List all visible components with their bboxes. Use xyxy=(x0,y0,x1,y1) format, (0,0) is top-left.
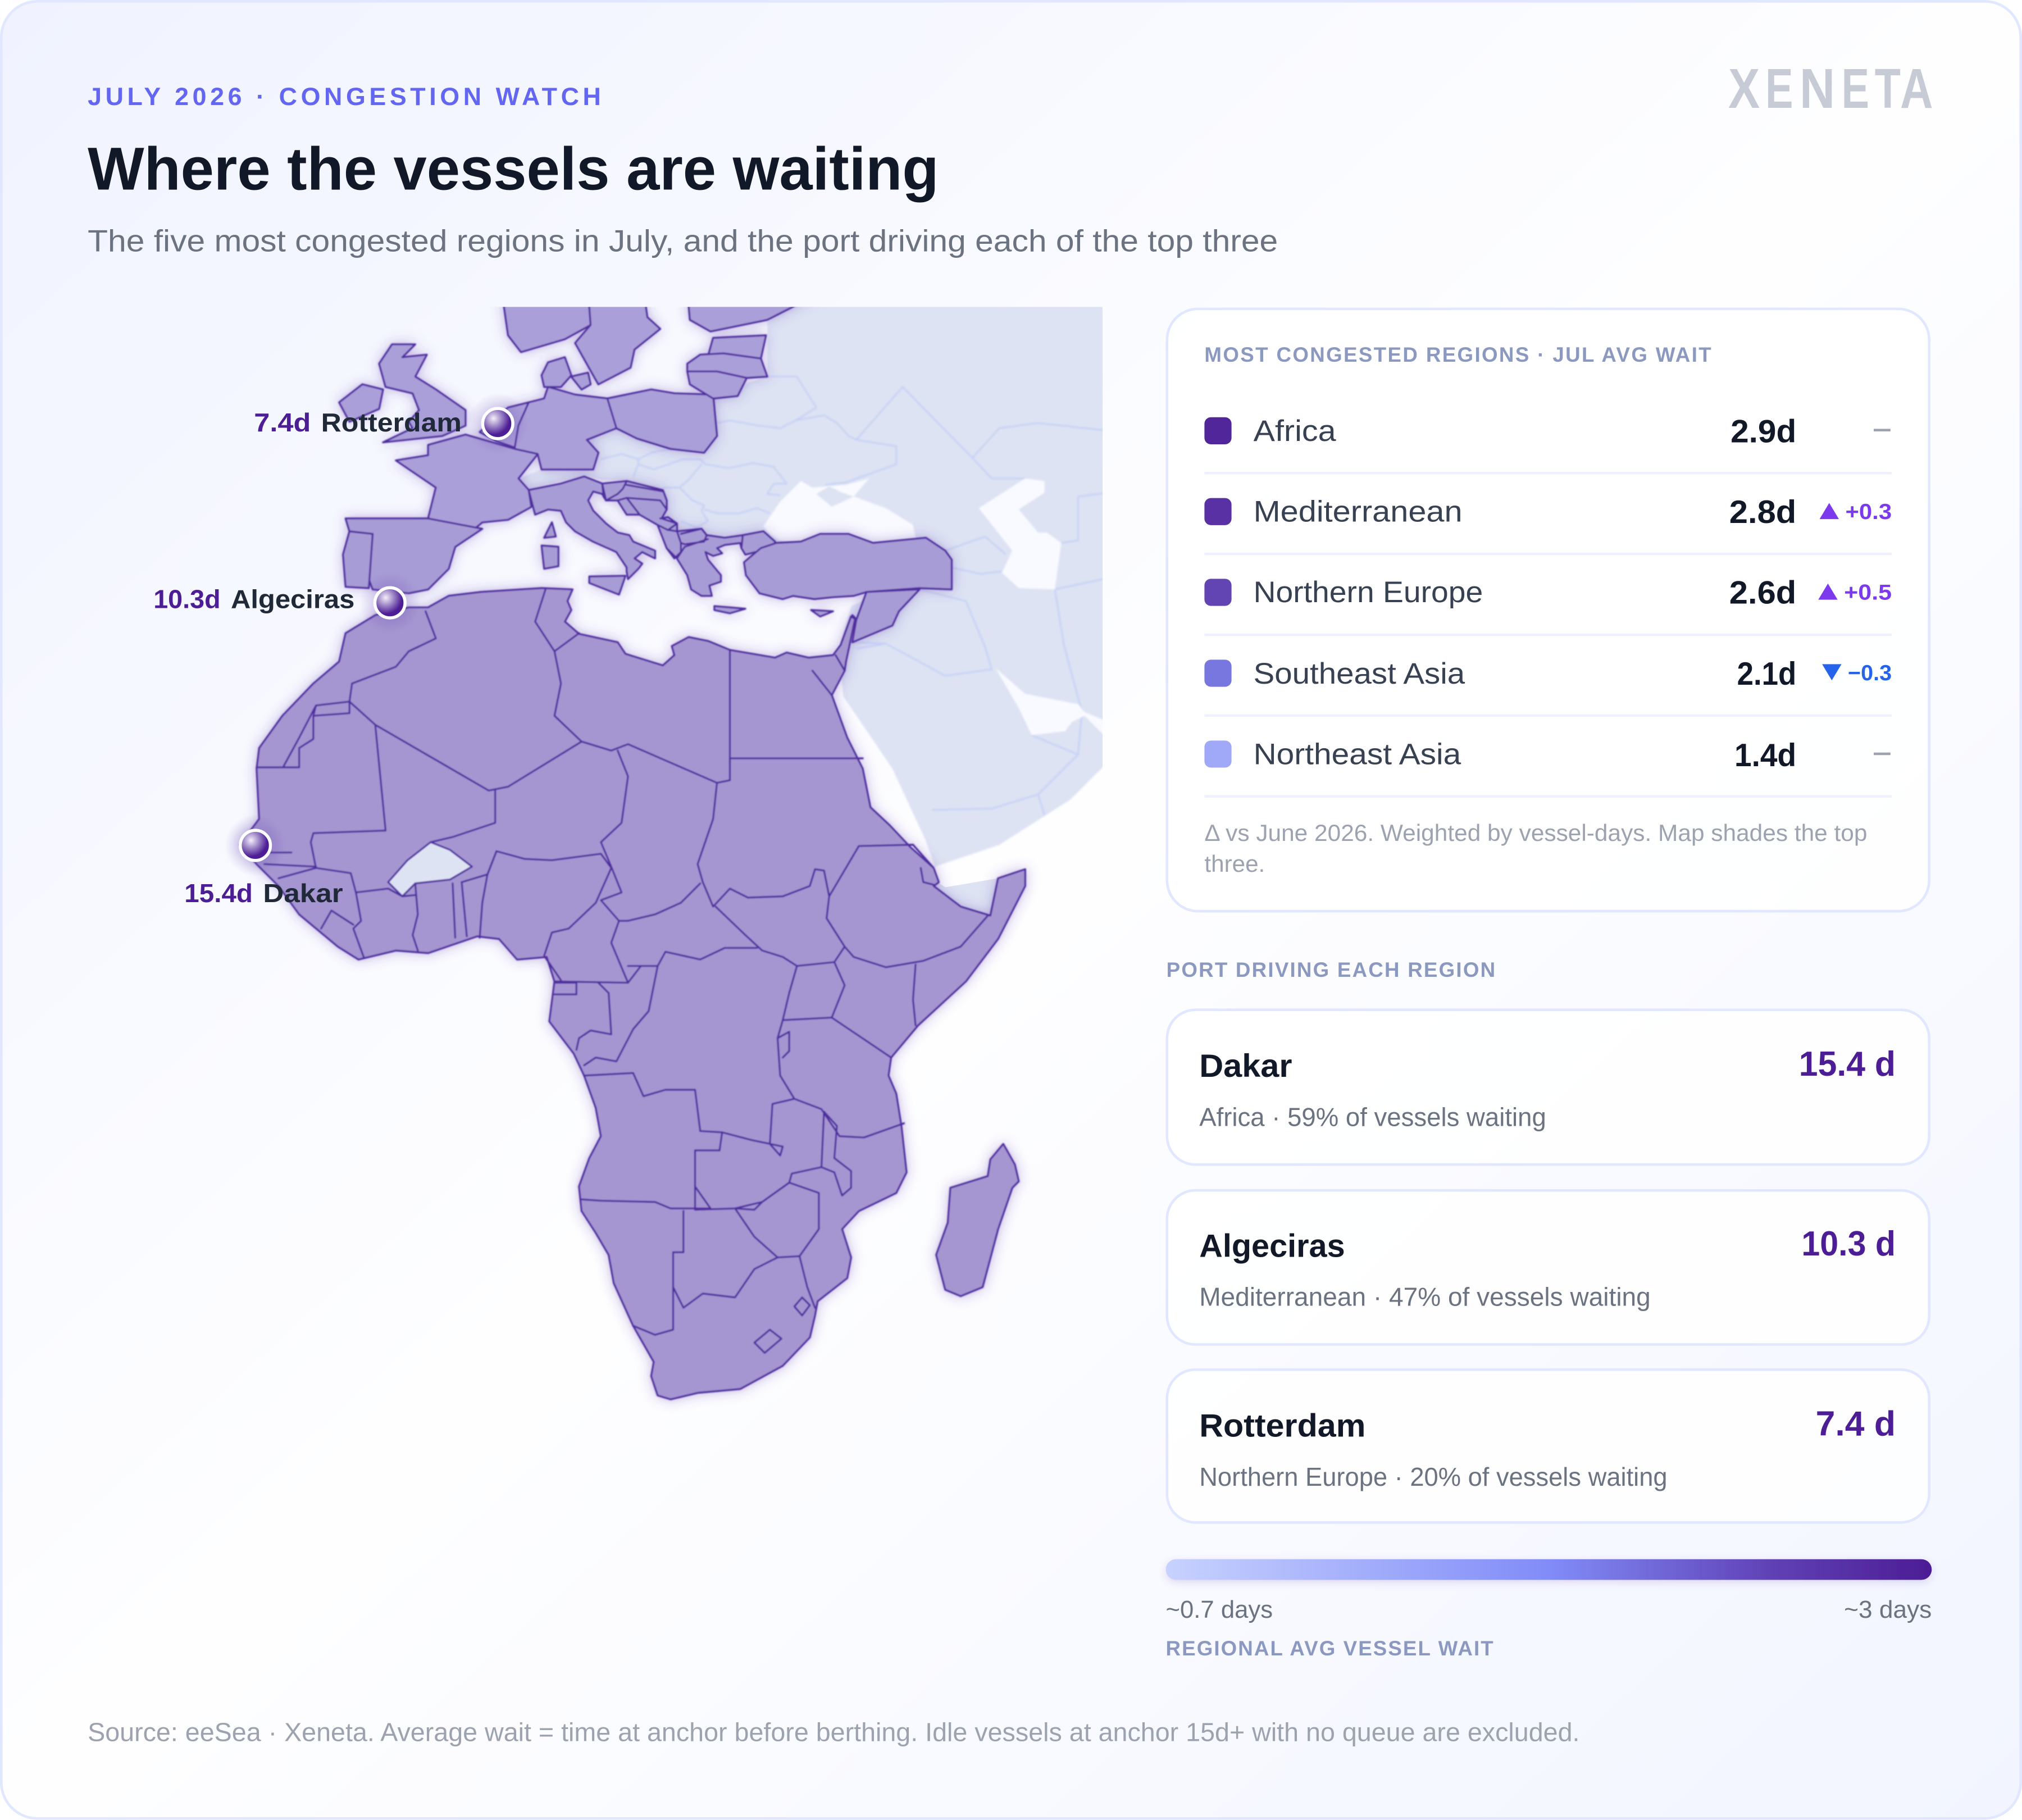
Africa national borders xyxy=(257,589,988,1335)
port card: Rotterdam: Northern Europe · 20% of vessels waiting xyxy=(1199,1462,1668,1491)
map label: Dakar: 15.4d xyxy=(184,879,253,908)
port card: Rotterdam: Rotterdam xyxy=(1199,1408,1365,1444)
logo: Xeneta: E xyxy=(1842,57,1869,120)
panel heading: MOST CONGESTED REGIONS · JUL AVG WAIT xyxy=(1204,343,1711,366)
row: Africa: 2.9d xyxy=(1730,414,1796,450)
logo: Xeneta: T xyxy=(1875,57,1901,120)
row: Mediterranean: +0.3 xyxy=(1845,500,1892,524)
row: Africa: Africa xyxy=(1254,415,1336,448)
port card: Algeciras xyxy=(1167,1190,1929,1344)
map pin: Algeciras xyxy=(359,572,421,634)
region: Mediterranean xyxy=(343,476,951,662)
row: Northeast Asia: 1.4d xyxy=(1734,738,1796,774)
legend: colour scale xyxy=(1166,1559,1932,1660)
map xyxy=(240,290,1109,1399)
pale country borders xyxy=(601,376,1109,815)
panel: most congested regions xyxy=(1167,309,1929,911)
logo: Xeneta: N xyxy=(1800,57,1835,120)
map label: Rotterdam: 7.4d xyxy=(254,408,311,437)
map label: Rotterdam xyxy=(254,408,462,437)
port card: Dakar: Dakar xyxy=(1199,1048,1292,1084)
map: Crimea xyxy=(816,486,854,507)
region: Northern Europe xyxy=(339,290,825,529)
panel footnote: three. xyxy=(1204,851,1265,877)
row: Northern Europe xyxy=(1204,575,1892,611)
legend: colour scale: REGIONAL AVG VESSEL WAIT xyxy=(1166,1637,1493,1660)
port card: Algeciras: Mediterranean · 47% of vessels waiting xyxy=(1199,1282,1651,1312)
row: Northern Europe: Northern Europe xyxy=(1254,576,1483,609)
map: Persian Gulf xyxy=(996,670,1103,736)
logo: Xeneta: E xyxy=(1765,57,1793,120)
row: Southeast Asia: 2.1d xyxy=(1737,656,1796,692)
port card: Dakar: 15.4 d xyxy=(1799,1045,1896,1084)
port card: Dakar: Africa · 59% of vessels waiting xyxy=(1199,1102,1546,1131)
row: Southeast Asia xyxy=(1204,656,1892,692)
map: highlighted regions xyxy=(240,290,1025,1399)
row: Africa xyxy=(1204,414,1891,450)
map pin: Dakar xyxy=(224,815,286,876)
legend: colour scale: ~3 days xyxy=(1844,1596,1932,1623)
row: Mediterranean: 2.8d xyxy=(1729,494,1796,530)
row: Northeast Asia xyxy=(1204,738,1891,774)
map: Caspian Sea xyxy=(979,479,1062,589)
map label: Algeciras: 10.3d xyxy=(153,585,221,614)
logo: Xeneta: A xyxy=(1900,57,1933,120)
legend: colour scale: ~0.7 days xyxy=(1166,1596,1273,1623)
row: Mediterranean xyxy=(1204,494,1892,530)
subtitle: The five most congested regions in July, and the port driving each of the top three xyxy=(88,224,1278,258)
source note: Source: eeSea · Xeneta. Average wait = time at anchor before berthing. Idle vessels at anchor 15d+ with no queue are excluded. xyxy=(88,1717,1580,1746)
map label: Dakar xyxy=(184,879,343,908)
row: Northern Europe: 2.6d xyxy=(1729,575,1796,611)
logo: Xeneta: X xyxy=(1728,57,1760,120)
map label: Algeciras: Algeciras xyxy=(231,585,354,614)
eyebrow: JULY 2026 · CONGESTION WATCH xyxy=(88,83,601,111)
logo: Xeneta xyxy=(1728,57,1933,120)
port card: Rotterdam: 7.4 d xyxy=(1816,1404,1896,1443)
row: Mediterranean: Mediterranean xyxy=(1254,495,1463,529)
section heading: ports: PORT DRIVING EACH REGION xyxy=(1167,958,1495,981)
row: Northern Europe: +0.5 xyxy=(1844,581,1892,605)
region: Africa xyxy=(240,588,1025,1399)
panel footnote: Δ vs June 2026. Weighted by vessel-days. Map shades the top xyxy=(1204,820,1867,846)
map label: Rotterdam: Rotterdam xyxy=(321,408,462,437)
port card: Algeciras: Algeciras xyxy=(1199,1228,1345,1264)
map: Black Sea xyxy=(763,479,917,548)
port card: Dakar xyxy=(1167,1010,1929,1164)
port card: Algeciras: 10.3 d xyxy=(1801,1225,1896,1263)
map label: Dakar: Dakar xyxy=(263,879,343,908)
panel footnote xyxy=(1204,820,1867,877)
title: Where the vessels are waiting xyxy=(88,135,939,203)
map pin: Rotterdam xyxy=(467,393,529,454)
row: Southeast Asia: −0.3 xyxy=(1848,661,1892,685)
Balkan borders xyxy=(606,481,743,558)
row: Northeast Asia: Northeast Asia xyxy=(1254,738,1461,771)
port card: Rotterdam xyxy=(1167,1369,1929,1522)
map: Somaliland gap xyxy=(936,879,998,914)
map label: Algeciras xyxy=(153,585,354,614)
row: Southeast Asia: Southeast Asia xyxy=(1254,657,1465,690)
map: pale non-highlighted countries xyxy=(518,297,1109,867)
